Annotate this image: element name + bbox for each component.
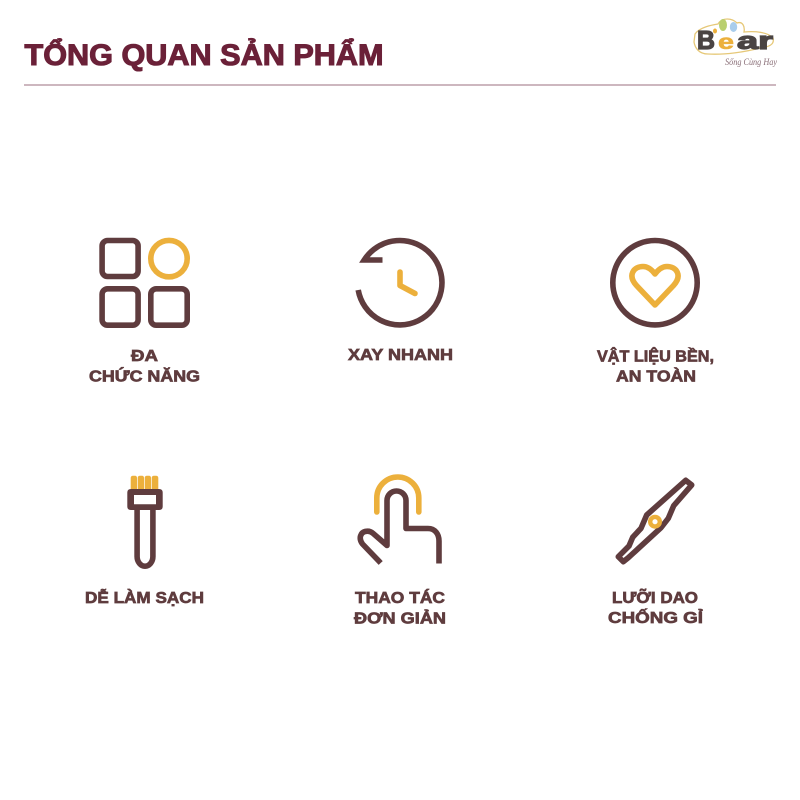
logo wordmark: e [718, 31, 734, 54]
label: XAY NHANH [348, 347, 453, 364]
label: ĐA [131, 348, 159, 365]
icon: heart in circle [613, 241, 697, 325]
label: ĐƠN GIẢN [354, 608, 446, 628]
label: VẬT LIỆU BỀN, [597, 346, 714, 366]
logo: Bear [694, 19, 777, 67]
paw toes [713, 19, 737, 34]
logo wordmark: B [697, 25, 715, 55]
icon: brush [127, 476, 163, 566]
feature: xay nhanh [348, 241, 453, 364]
logo wordmark: ar [737, 28, 773, 55]
label: CHỨC NĂNG [89, 366, 200, 386]
icon: four tiles [102, 240, 187, 325]
feature: thao tác đơn giản [354, 477, 446, 628]
label [354, 588, 446, 628]
logo tagline: Sống Cùng Hay [725, 57, 777, 67]
feature: lưỡi dao chống gỉ [608, 480, 704, 627]
label [89, 348, 200, 386]
icon: tapping hand [360, 477, 439, 564]
label: LƯỠI DAO [612, 587, 698, 607]
label [608, 587, 704, 627]
icon: clock [358, 241, 442, 325]
logo wordmark [697, 25, 773, 55]
feature: đa chức năng [89, 240, 200, 386]
label: DỄ LÀM SẠCH [85, 588, 204, 607]
label: CHỐNG GỈ [608, 607, 704, 627]
label [597, 346, 714, 386]
label: AN TOÀN [616, 366, 696, 386]
label: THAO TÁC [355, 588, 445, 607]
feature: dễ làm sạch [85, 476, 204, 607]
title: TỔNG QUAN SẢN PHẨM [24, 38, 383, 72]
feature: vật liệu bền [597, 241, 714, 386]
icon: blade [618, 480, 692, 562]
